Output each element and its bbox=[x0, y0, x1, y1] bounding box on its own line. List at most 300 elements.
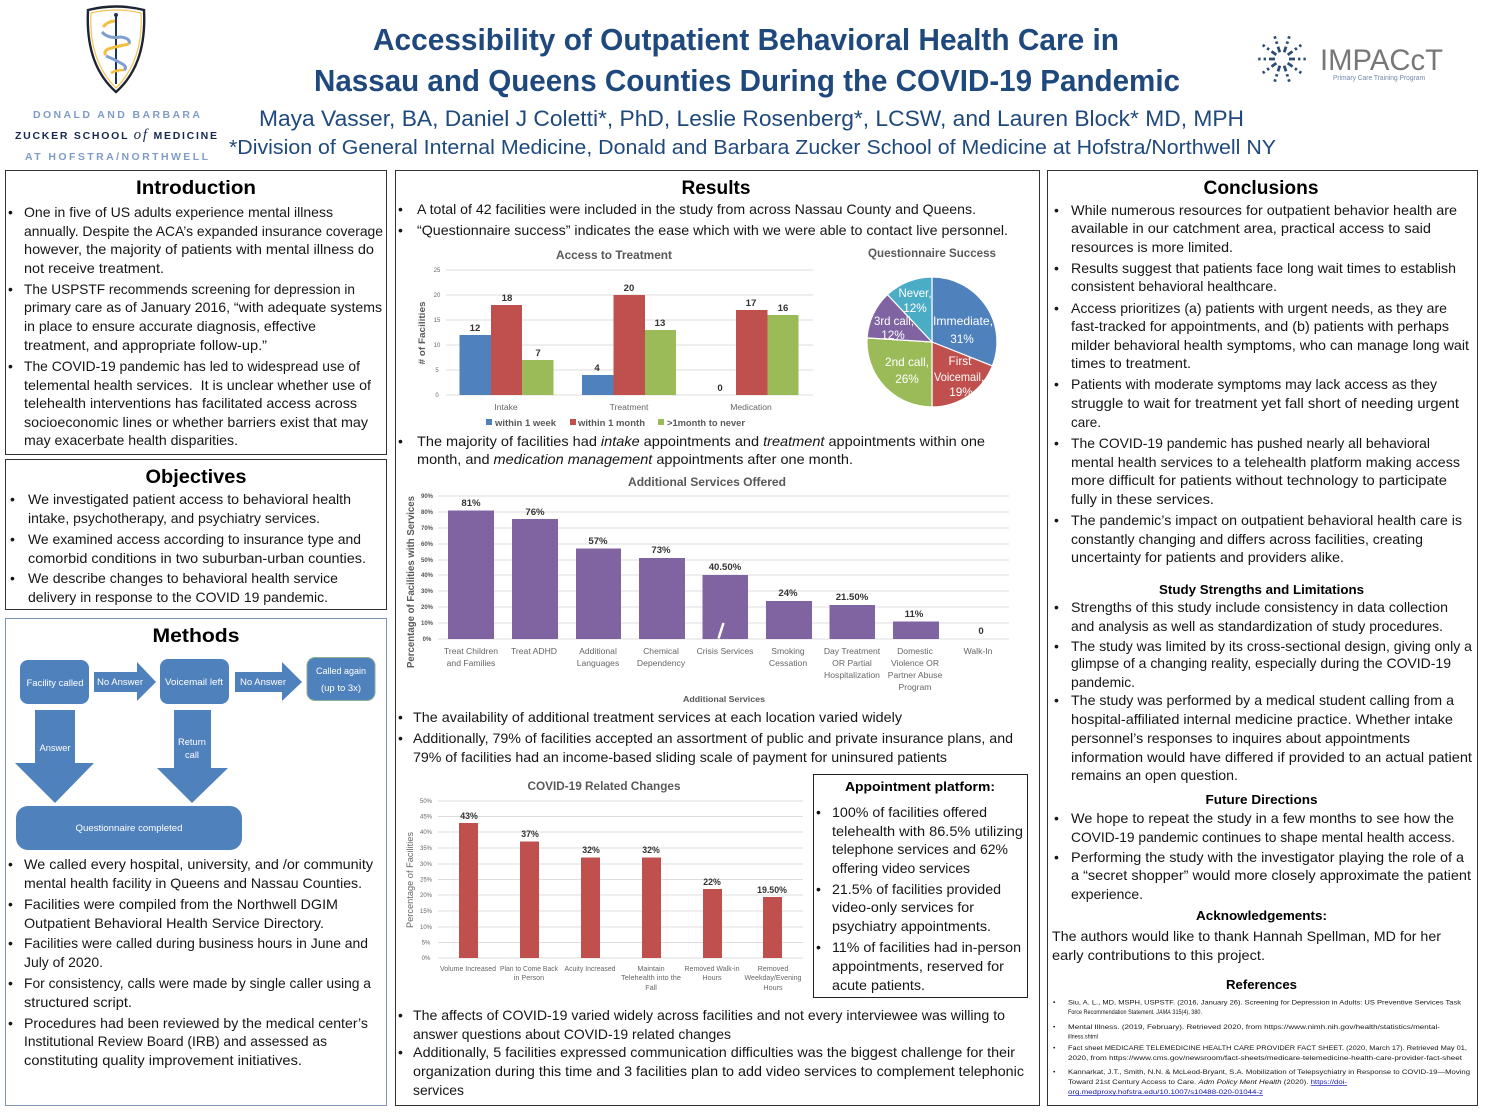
bullet: in-person: appointments, reserved for bbox=[832, 958, 1004, 974]
reference list: Toward 21st Century Access to Care. Adm Policy Ment Health (2020). https://doi- bbox=[1068, 1079, 1347, 1086]
bullet: resources: resources is more limited. bbox=[1071, 239, 1233, 255]
bullet: medical student caller: The study was performed by a medical student calling from a bbox=[1071, 692, 1454, 708]
flowchart: call procedure bbox=[15, 658, 375, 850]
panel: conclusions bbox=[1048, 170, 1478, 1106]
bullet: consistency: For consistency, calls were made by single caller using a bbox=[24, 975, 371, 991]
bullet: secret shopper: • bbox=[1054, 849, 1059, 865]
bullet: telehealth offered: telephone services and 62% bbox=[832, 841, 1008, 857]
bar chart: COVID-19 related changes: 15% bbox=[420, 909, 433, 915]
bar chart: additional services offered: Day Treatment bbox=[824, 646, 881, 656]
reference list: Kannarkat, J.T., Smith, N.N. & McLeod-Bryant, S.A. Mobilization of Telepsychiatry in Response to COVID-19—Moving bbox=[1068, 1069, 1470, 1076]
logo text: medical school name: ZUCKER SCHOOL of MEDICINE bbox=[15, 127, 217, 143]
heading: acknowledgements: Acknowledgements: bbox=[1196, 908, 1327, 923]
bar chart: access to treatment: 12 bbox=[470, 323, 480, 334]
bullet: video-only bbox=[816, 881, 1001, 934]
bar chart: COVID-19 related changes: 32% bbox=[642, 845, 660, 855]
bullet: insurance and comorbid conditions: comorbid conditions in two suburban-urban counties. bbox=[28, 550, 366, 566]
bullet: USPSTF screening: in place to ensure accurate diagnosis, effective bbox=[24, 318, 316, 334]
bullet: telehealth platform bbox=[1054, 435, 1460, 507]
bar chart: COVID-19 related changes: Percentage of Facilities bbox=[405, 832, 416, 928]
bullet: telehealth platform: mental health services to a telehealth platform making access bbox=[1071, 454, 1460, 470]
bullet: prevalence of mental illness: not receive treatment. bbox=[24, 260, 164, 276]
bullet: questionnaire success definition: “Questionnaire success” indicates the ease which with we were able to contact live personnel. bbox=[417, 222, 1008, 238]
panel: objectives bbox=[6, 460, 386, 610]
bullet: strengths bbox=[1054, 599, 1448, 634]
bullet: strengths: and analysis as well as standardization of study procedures. bbox=[1071, 618, 1443, 634]
pie chart: questionnaire success: Immediate, bbox=[933, 314, 993, 328]
bar chart: COVID-19 related changes: Removed Walk-in bbox=[684, 964, 740, 973]
logo: IMPACcT primary care training program bbox=[1258, 36, 1443, 82]
bullet: directory: • bbox=[8, 896, 13, 912]
bullet: repeat the study: We hope to repeat the study in a few months to see how the bbox=[1071, 810, 1454, 826]
bullet: insurance and comorbid conditions bbox=[10, 531, 366, 566]
bullet: service delivery changes: We describe changes to behavioral health service bbox=[28, 570, 338, 586]
bars: intake bbox=[460, 305, 554, 395]
bar chart: access to treatment: 7 bbox=[535, 348, 541, 359]
bar chart: additional services offered: 50% bbox=[421, 558, 434, 564]
heading: references: References bbox=[1226, 977, 1297, 992]
bullet: facilities called: • bbox=[8, 856, 13, 872]
bullet: access priorities: times to treatment. bbox=[1071, 355, 1191, 371]
bar chart: COVID-19 related changes: 45% bbox=[420, 814, 433, 820]
bullet: repeat the study: COVID-19 pandemic continues to shape mental health access. bbox=[1071, 829, 1455, 845]
heading: introduction: Introduction bbox=[136, 177, 256, 199]
heading: study strengths and limitations: Study Strengths and Limitations bbox=[1159, 582, 1364, 597]
bullet: appointment timing: • bbox=[398, 433, 403, 449]
legend: within 1 month bbox=[577, 418, 645, 428]
bullet: video-only: 21.5% of facilities provided bbox=[832, 881, 1001, 897]
logo text: medical school name bbox=[15, 109, 217, 163]
reference list: • bbox=[1053, 1045, 1056, 1052]
reference list: Force Recommendation Statement. JAMA 315(4), 380. bbox=[1068, 1009, 1202, 1016]
bullet: wait times: consistent behavioral healthcare. bbox=[1071, 278, 1277, 294]
bullet: medical student caller bbox=[1054, 692, 1472, 783]
bar chart: access to treatment: Treatment bbox=[610, 402, 649, 412]
bar chart: additional services offered: Additional Services Offered bbox=[628, 477, 786, 489]
bullet: moderate symptoms: Patients with moderate symptoms may lack access as they bbox=[1071, 376, 1437, 392]
bullet: access priorities: fast-tracked for appointments, and (b) patients with perhaps bbox=[1071, 318, 1449, 334]
bullet: pandemic impact bbox=[1054, 512, 1462, 565]
bullet: cross-sectional limitation: • bbox=[1054, 638, 1059, 654]
bar chart: COVID-19 related changes: 19.50% bbox=[757, 885, 787, 895]
callout: appointment platform bbox=[814, 774, 1028, 998]
bullet: telemental health: socioeconomic lines or whether barriers exist that may bbox=[24, 414, 368, 430]
bar chart: COVID-19 related changes: Volume Increased bbox=[440, 964, 496, 973]
title: Nassau and Queens Counties During the COVID-19 Pandemic bbox=[314, 64, 1180, 98]
bullet: cross-sectional limitation bbox=[1054, 638, 1472, 690]
reference list: • bbox=[1053, 1069, 1056, 1076]
bar chart: additional services offered: 30% bbox=[421, 589, 434, 595]
bullet: secret shopper: a “secret shopper” would more closely approximate the patient bbox=[1071, 867, 1471, 883]
logo text: medical school name: DONALD AND BARBARA bbox=[33, 109, 200, 121]
bar chart: access to treatment: Medication bbox=[730, 402, 772, 412]
pie chart: questionnaire success: 26% bbox=[895, 372, 919, 386]
pie chart: questionnaire success: 12% bbox=[903, 301, 927, 315]
bar chart: access to treatment: 20 bbox=[624, 283, 634, 294]
bullet: strengths: • bbox=[1054, 599, 1059, 615]
reference list: • bbox=[1053, 1024, 1056, 1031]
bullet: secret shopper: Performing the study with the investigator playing the role of a bbox=[1071, 849, 1464, 865]
bar chart: COVID-19 related changes: Weekday/Evening bbox=[744, 973, 802, 982]
bullet: cross-sectional limitation: The study was limited by its cross-sectional design, giving only a bbox=[1071, 638, 1472, 654]
arrow: no answer bbox=[94, 662, 156, 701]
bar chart: COVID-19 related changes: Maintain bbox=[637, 964, 665, 973]
bullet: medical student caller: hospital-affiliated internal medicine practice. Whether intake bbox=[1071, 711, 1453, 727]
bar chart: access to treatment: 15 bbox=[434, 318, 441, 324]
arrow: no answer: No Answer bbox=[97, 677, 143, 687]
bullet: telehealth platform: • bbox=[1054, 435, 1059, 451]
bar chart: access to treatment: # of Facilities bbox=[417, 302, 428, 364]
bullet: in-person bbox=[816, 939, 1021, 993]
reference list: Mental Illness. (2019, February). Retrieved 2020, from https://www.nimh.nih.gov/health/statistics/mental- bbox=[1068, 1024, 1440, 1031]
bar chart: additional services offered: 40% bbox=[421, 573, 434, 579]
bullet: prevalence of mental illness: One in five of US adults experience mental illness bbox=[24, 204, 333, 220]
bar chart: COVID-19 related changes: 35% bbox=[420, 846, 433, 852]
arrow: return call bbox=[157, 710, 228, 803]
bullet: repeat the study bbox=[1054, 810, 1455, 845]
pie chart: questionnaire success: 2nd call, bbox=[885, 355, 929, 369]
bar chart: COVID-19 related changes: 37% bbox=[521, 829, 539, 839]
legend: >1month to never bbox=[667, 418, 746, 428]
bar chart: additional services offered: Crisis Services bbox=[697, 646, 753, 656]
bullet: facilities included: • bbox=[398, 201, 403, 217]
bar chart: additional services offered: Percentage of Facilities with Services bbox=[405, 496, 417, 668]
bullet: consistency: structured script. bbox=[24, 994, 132, 1010]
bar chart: additional services offered: 0 bbox=[978, 626, 984, 637]
bullet: in-person: acute patients. bbox=[832, 977, 925, 993]
bars: changes bbox=[459, 823, 782, 958]
reference list: 2020, from https://www.cms.gov/newsroom/fact-sheets/medicare-telemedicine-health-care-provider-fact-sheet bbox=[1068, 1055, 1462, 1062]
bar chart: COVID-19 related changes: 40% bbox=[420, 830, 433, 836]
box: voicemail left bbox=[160, 659, 229, 704]
bullet: medical student caller: • bbox=[1054, 692, 1059, 708]
bullet: telemental health: telehealth interventions has facilitated access across bbox=[24, 395, 357, 411]
bar chart: COVID-19 related changes: Hours bbox=[702, 973, 722, 982]
bar chart: COVID-19 related changes: 0% bbox=[422, 956, 431, 962]
bar chart: access to treatment: 10 bbox=[434, 343, 441, 349]
bullet: moderate symptoms: care. bbox=[1071, 414, 1101, 430]
legend: within 1 week bbox=[494, 418, 557, 428]
box: questionnaire completed: Questionnaire completed bbox=[76, 823, 182, 833]
bullet: IRB review: constituting quality improvement initiatives. bbox=[24, 1052, 302, 1068]
bar chart: additional services offered: Languages bbox=[577, 658, 619, 668]
bullet: facilities called: mental health facility in Queens and Nassau Counties. bbox=[24, 875, 362, 891]
box: facility called bbox=[20, 660, 89, 704]
pie chart: questionnaire success: Never, bbox=[898, 286, 932, 300]
bar chart: additional services offered: Additional bbox=[579, 646, 617, 656]
bar chart: COVID-19 related changes bbox=[405, 781, 803, 992]
bullet: moderate symptoms: • bbox=[1054, 376, 1059, 392]
bullet: IRB review bbox=[8, 1015, 368, 1068]
logo: IMPACcT primary care training program: IMPACcT bbox=[1320, 44, 1443, 77]
panel: introduction bbox=[6, 170, 386, 454]
bar chart: additional services offered bbox=[405, 477, 1009, 704]
bar chart: COVID-19 related changes: 20% bbox=[420, 893, 433, 899]
pie chart: questionnaire success: 12% bbox=[881, 328, 905, 342]
bullet: communication difficulties: • bbox=[398, 1044, 403, 1060]
bullet: patient access: • bbox=[10, 491, 15, 507]
bar chart: access to treatment: 20 bbox=[434, 293, 441, 299]
reference list: Fact sheet MEDICARE TELEMEDICINE HEALTH CARE PROVIDER FACT SHEET. (2020, March 17). Retrieved May 01, bbox=[1068, 1045, 1467, 1052]
bullet: effects varied: • bbox=[398, 1007, 403, 1023]
bullet: USPSTF screening: treatment, and appropriate follow-up.” bbox=[24, 337, 267, 353]
bar chart: additional services offered: 0% bbox=[423, 637, 432, 643]
bar chart: additional services offered: 24% bbox=[778, 588, 798, 599]
bullet: telehealth offered: offering video services bbox=[832, 860, 970, 876]
bullet: insurance plans and sliding scale: 79% of facilities had an income-based sliding scale of payment for uninsured patients bbox=[413, 749, 947, 765]
bar chart: COVID-19 related changes: 25% bbox=[420, 878, 433, 884]
bar chart: access to treatment: 4 bbox=[594, 363, 600, 374]
bullet: video-only: psychiatry appointments. bbox=[832, 918, 991, 934]
bar chart: additional services offered: Violence OR bbox=[891, 658, 939, 668]
bullet: wait times: Results suggest that patients face long wait times to establish bbox=[1071, 260, 1456, 276]
bullet: prevalence of mental illness: • bbox=[8, 204, 13, 220]
arrow: no answer: No Answer bbox=[240, 677, 286, 687]
arrow: return call: call bbox=[185, 750, 199, 760]
bar chart: additional services offered: 90% bbox=[421, 494, 434, 500]
authors: Maya Vasser, BA, Daniel J Coletti*, PhD, Leslie Rosenberg*, LCSW, and Lauren Block* MD, MPH bbox=[259, 106, 1244, 131]
bullet: telehealth platform: The COVID-19 pandemic has pushed nearly all behavioral bbox=[1071, 435, 1430, 451]
title bbox=[314, 23, 1180, 98]
bullet: communication difficulties: organization during this time and 3 facilities plan to add video services to complement telephonic bbox=[413, 1063, 1024, 1079]
bullet: strengths: Strengths of this study include consistency in data collection bbox=[1071, 599, 1448, 615]
bullet: medical student caller: remains an open question. bbox=[1071, 767, 1238, 783]
bar chart: access to treatment: 0 bbox=[435, 393, 439, 399]
bullet: prevalence of mental illness: however, the majority of patients with mental illness do bbox=[24, 241, 374, 257]
bar chart: COVID-19 related changes: Hours bbox=[763, 983, 783, 992]
bullet: insurance and comorbid conditions: We examined access according to insurance type and bbox=[28, 531, 361, 547]
bar chart: additional services offered: 11% bbox=[905, 609, 924, 620]
bar chart: COVID-19 related changes: COVID-19 Related Changes bbox=[528, 781, 680, 793]
box: questionnaire completed bbox=[16, 806, 242, 850]
bullet: communication difficulties bbox=[398, 1044, 1024, 1098]
bullet: telemental health bbox=[8, 358, 371, 448]
bar chart: additional services offered: 20% bbox=[421, 605, 434, 611]
reference list: • bbox=[1053, 1000, 1056, 1006]
bars: treatment bbox=[582, 295, 676, 395]
heading: results: Results bbox=[682, 177, 751, 199]
bullet: IRB review: • bbox=[8, 1015, 13, 1031]
box: called again: Called again bbox=[316, 666, 366, 676]
bar chart: additional services offered: 80% bbox=[421, 510, 434, 516]
bullet: IRB review: Institutional Review Board (IRB) and assessed as bbox=[24, 1033, 327, 1049]
bullet: telehealth offered bbox=[816, 804, 1023, 876]
bullet: directory: Outpatient Behavioral Health Service Directory. bbox=[24, 915, 324, 931]
bullet: medical student caller: personnel’s responses to inquires about appointments bbox=[1071, 730, 1410, 746]
heading: conclusions: Conclusions bbox=[1204, 177, 1319, 199]
reference list bbox=[1053, 1000, 1470, 1096]
bullet: availability varied: • bbox=[398, 709, 403, 725]
bullet: facilities included: A total of 42 facilities were included in the study from across Nassau County and Queens. bbox=[417, 201, 976, 217]
bullet: insurance plans and sliding scale bbox=[398, 730, 1013, 765]
bullet: appointment timing bbox=[398, 433, 985, 467]
bar chart: additional services offered: Hospitalization bbox=[824, 670, 880, 680]
bar chart: COVID-19 related changes: 30% bbox=[420, 862, 433, 868]
bar chart: COVID-19 related changes: Fall bbox=[645, 983, 657, 992]
bar chart: COVID-19 related changes: 43% bbox=[460, 811, 478, 821]
box: called again bbox=[307, 658, 375, 700]
bar chart: access to treatment: 13 bbox=[655, 318, 665, 329]
bullet: timing: Facilities were called during business hours in June and bbox=[24, 935, 368, 951]
reference list: Siu, A. L., MD, MSPH, USPSTF. (2016, January 26). Screening for Depression in Adults: US Preventive Services Task bbox=[1068, 1000, 1462, 1006]
bar chart: additional services offered: and Families bbox=[447, 658, 495, 668]
bar chart: access to treatment: Intake bbox=[494, 402, 518, 412]
bars: services bbox=[448, 510, 939, 639]
bullet: video-only: • bbox=[816, 881, 821, 897]
bar chart: access to treatment: 17 bbox=[746, 298, 756, 309]
bullet: telehealth offered: 100% of facilities offered bbox=[832, 804, 987, 820]
arrow: return call: Return bbox=[178, 737, 206, 747]
bullet: resources: While numerous resources for outpatient behavior health are bbox=[1071, 202, 1457, 218]
bullet: telehealth platform: fully in these services. bbox=[1071, 491, 1214, 507]
bullet: questionnaire success definition: • bbox=[398, 222, 403, 238]
bar chart: additional services offered: Treat ADHD bbox=[511, 646, 557, 656]
bullet: timing bbox=[8, 935, 368, 970]
bullet: service delivery changes: • bbox=[10, 570, 15, 586]
bar chart: access to treatment: 25 bbox=[434, 268, 441, 274]
bar chart: additional services offered: 70% bbox=[421, 526, 434, 532]
box: called again: (up to 3x) bbox=[321, 683, 361, 693]
bar chart: additional services offered: Cessation bbox=[769, 658, 807, 668]
bullet: access priorities: • bbox=[1054, 300, 1059, 316]
bullet: cross-sectional limitation: pandemic. bbox=[1071, 674, 1135, 690]
bar chart: COVID-19 related changes: Plan to Come Back bbox=[500, 964, 558, 973]
bullet: access priorities: milder behavioral health symptoms, who can manage long wait bbox=[1071, 337, 1469, 353]
pie chart: questionnaire success bbox=[867, 248, 997, 407]
text: acknowledgements: The authors would like to thank Hannah Spellman, MD for her bbox=[1052, 928, 1441, 944]
bullet: telehealth offered: telehealth with 86.5% utilizing bbox=[832, 823, 1023, 839]
bullet: timing: July of 2020. bbox=[24, 954, 103, 970]
bar chart: access to treatment: 16 bbox=[778, 303, 788, 314]
arrow: answer: Answer bbox=[40, 743, 70, 753]
bullet: secret shopper bbox=[1054, 849, 1471, 902]
bullet: USPSTF screening bbox=[8, 281, 382, 353]
bar chart: additional services offered: Domestic bbox=[897, 646, 934, 656]
logo text: medical school name: AT HOFSTRA/NORTHWELL bbox=[25, 151, 209, 163]
bullet: moderate symptoms bbox=[1054, 376, 1459, 430]
bar chart: access to treatment: 18 bbox=[502, 293, 513, 304]
bar chart: additional services offered: OR Partial bbox=[832, 658, 872, 668]
heading: methods: Methods bbox=[152, 625, 240, 647]
bullet: consistency: • bbox=[8, 975, 13, 991]
bar chart: additional services offered: Partner Abuse bbox=[888, 670, 942, 680]
title: Accessibility of Outpatient Behavioral Health Care in bbox=[373, 23, 1119, 57]
pie chart: questionnaire success: Voicemail, bbox=[934, 370, 984, 384]
bullet: communication difficulties: services bbox=[413, 1082, 464, 1098]
bar chart: COVID-19 related changes: 50% bbox=[420, 799, 433, 805]
bar chart: COVID-19 related changes: 22% bbox=[703, 877, 721, 887]
bullet: service delivery changes bbox=[10, 570, 338, 605]
bullet: telehealth offered: • bbox=[816, 804, 821, 820]
pie chart: questionnaire success: 31% bbox=[950, 332, 974, 346]
bullet: patient access: intake, psychotherapy, and psychiatry services. bbox=[28, 510, 320, 526]
bullet: in-person: 11% of facilities had in-person bbox=[832, 939, 1021, 955]
bullet: USPSTF screening: • bbox=[8, 281, 13, 297]
bullet: in-person: • bbox=[816, 939, 821, 955]
pie chart: questionnaire success: First bbox=[949, 354, 972, 368]
bullet: telemental health: • bbox=[8, 358, 13, 374]
bullet: insurance and comorbid conditions: • bbox=[10, 531, 15, 547]
bullet: repeat the study: • bbox=[1054, 810, 1059, 826]
bar chart: additional services offered: Additional Services bbox=[683, 694, 765, 704]
bullet: directory bbox=[8, 896, 338, 931]
bullet: USPSTF screening: The USPSTF recommends screening for depression in bbox=[24, 281, 355, 297]
bar chart: additional services offered: Treat Children bbox=[444, 646, 498, 656]
affiliation: *Division of General Internal Medicine, Donald and Barbara Zucker School of Medicine at Hofstra/Northwell NY bbox=[229, 137, 1276, 159]
bars: medication bbox=[736, 310, 798, 395]
pie chart: questionnaire success: Questionnaire Success bbox=[868, 248, 996, 260]
bullet: access priorities: Access prioritizes (a) patients with urgent needs, as they are bbox=[1071, 300, 1447, 316]
bar chart: COVID-19 related changes: Telehealth into the bbox=[621, 973, 681, 982]
bullet: facilities called: We called every hospital, university, and /or community bbox=[24, 856, 373, 872]
bullet: wait times bbox=[1054, 260, 1456, 294]
bullet: timing: • bbox=[8, 935, 13, 951]
bar chart: COVID-19 related changes: in Person bbox=[514, 973, 544, 982]
heading: future directions: Future Directions bbox=[1206, 792, 1318, 807]
bullet: telehealth platform: more difficult for patients without technology to participate bbox=[1071, 472, 1447, 488]
panel: methods bbox=[6, 618, 386, 1106]
bullet: IRB review: Procedures had been reviewed by the medical center’s bbox=[24, 1015, 368, 1031]
bullet: facilities called bbox=[8, 856, 373, 891]
text: acknowledgements bbox=[1052, 928, 1441, 963]
bullet: pandemic impact: constantly changing and differs across facilities, creating bbox=[1071, 531, 1423, 547]
bar chart: additional services offered: 21.50% bbox=[836, 592, 869, 603]
bullet: effects varied: answer questions about COVID-19 related changes bbox=[413, 1026, 731, 1042]
bullet: medical student caller: information would have differed if provided to an actual patient bbox=[1071, 749, 1472, 765]
bar chart: COVID-19 related changes: 5% bbox=[422, 940, 431, 946]
pie chart: questionnaire success: 19% bbox=[949, 385, 973, 399]
bar chart: additional services offered: 81% bbox=[461, 498, 481, 509]
bar chart: additional services offered: Program bbox=[899, 682, 931, 692]
bullet: resources: • bbox=[1054, 202, 1059, 218]
bullet: directory: Facilities were compiled from the Northwell DGIM bbox=[24, 896, 338, 912]
arrow: answer bbox=[15, 710, 94, 803]
pie chart: questionnaire success: 3rd call, bbox=[874, 314, 914, 328]
bar chart: COVID-19 related changes: Removed bbox=[758, 964, 788, 973]
bar chart: additional services offered: 10% bbox=[421, 621, 434, 627]
bullet: resources bbox=[1054, 202, 1457, 255]
bullet: wait times: • bbox=[1054, 260, 1059, 276]
bullet: insurance plans and sliding scale: • bbox=[398, 730, 403, 746]
box: facility called: Facility called bbox=[26, 678, 84, 688]
bullet: moderate symptoms: struggle to wait for treatment yet fall short of needing urgent bbox=[1071, 395, 1459, 411]
bullet: cross-sectional limitation: glimpse of a changing reality, especially during the COVID-19 bbox=[1071, 655, 1451, 671]
bullet: consistency bbox=[8, 975, 371, 1010]
legend bbox=[486, 418, 746, 428]
logo: IMPACcT primary care training program: Primary Care Training Program bbox=[1333, 73, 1425, 82]
reference list: org.medproxy.hofstra.edu/10.1007/s10488-020-01044-z bbox=[1068, 1089, 1263, 1096]
bar chart: additional services offered: 76% bbox=[525, 507, 545, 518]
bar chart: COVID-19 related changes: 32% bbox=[582, 845, 600, 855]
arrow: no answer bbox=[235, 662, 302, 701]
bullet: USPSTF screening: primary care as of January 2016, “with adequate systems bbox=[24, 299, 382, 315]
bar chart: COVID-19 related changes: Acuity Increased bbox=[564, 964, 616, 973]
bullet: telemental health: telemental health services. It is unclear whether use of bbox=[24, 377, 371, 393]
bullet: resources: available in our catchment area, practical access to said bbox=[1071, 220, 1431, 236]
bullet: effects varied bbox=[398, 1007, 1005, 1042]
bullet: pandemic impact: • bbox=[1054, 512, 1059, 528]
box: voicemail left: Voicemail left bbox=[165, 677, 223, 687]
bar chart: additional services offered: 57% bbox=[588, 536, 608, 547]
bar chart: additional services offered: Chemical bbox=[643, 646, 679, 656]
bullet: telemental health: may exacerbate health disparities. bbox=[24, 432, 238, 448]
bullet: effects varied: The affects of COVID-19 varied widely across facilities and not every interviewee was willing to bbox=[413, 1007, 1005, 1023]
heading: appointment platform: Appointment platform: bbox=[845, 779, 995, 794]
bullet: patient access: We investigated patient access to behavioral health bbox=[28, 491, 351, 507]
panel: results bbox=[396, 170, 1040, 1106]
bar chart: additional services offered: 60% bbox=[421, 542, 434, 548]
reference list: illness.shtml bbox=[1068, 1034, 1098, 1040]
